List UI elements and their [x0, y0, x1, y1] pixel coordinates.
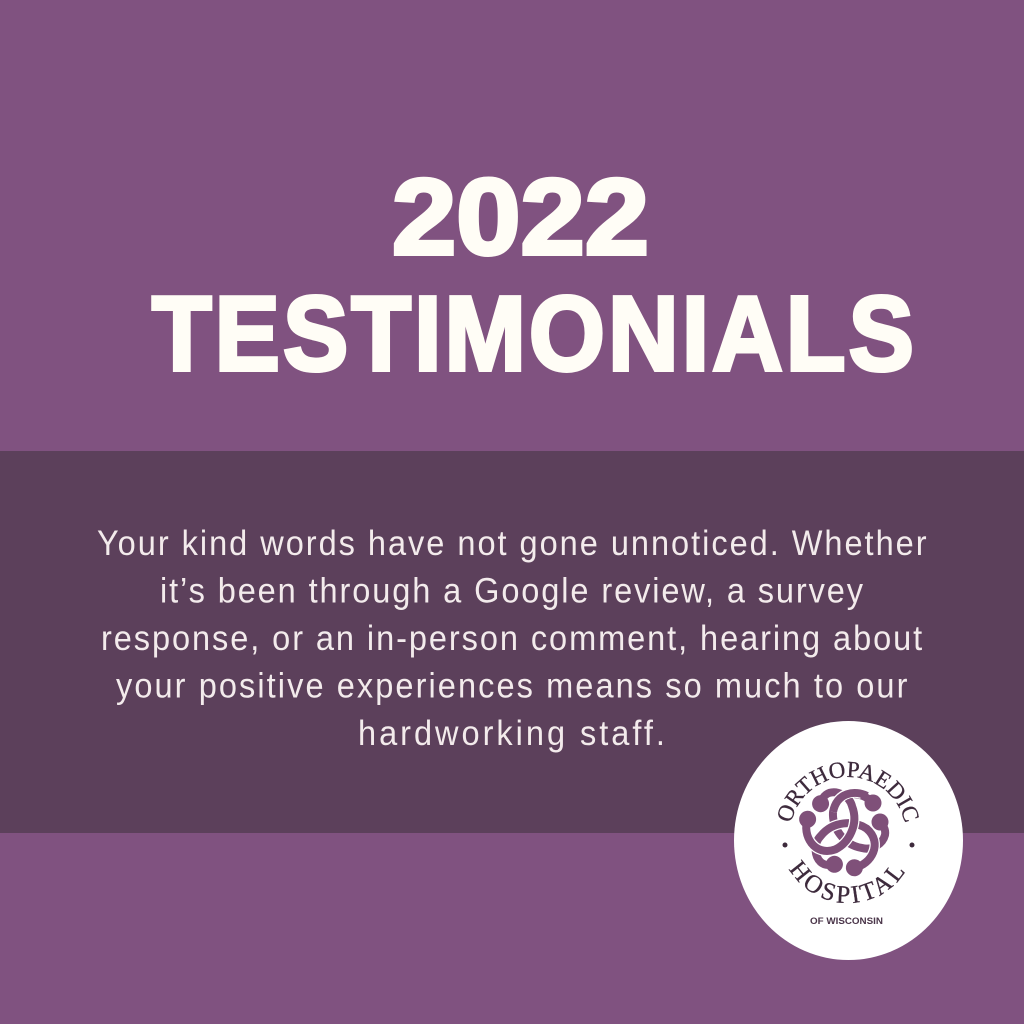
icon: knot emblem [794, 786, 888, 883]
message text: Your kind words have not gone unnoticed. Whether [97, 524, 927, 563]
logo dots [782, 842, 914, 848]
dark message band [0, 451, 1024, 833]
title: 2022 [392, 156, 649, 277]
logo badge [734, 721, 963, 960]
logo text: of wisconsin: OF WISCONSIN [810, 916, 883, 927]
message text: your positive experiences means so much to our [116, 666, 907, 706]
message text: hardworking staff. [358, 714, 665, 753]
message text: it’s been through a Google review, a survey [160, 571, 863, 611]
logo text: hospital: HOSPITAL [788, 859, 905, 904]
logo text: orthopaedic: ORTHOPAEDIC [778, 762, 919, 822]
message text [97, 524, 927, 753]
title [152, 156, 914, 393]
message text: response, or an in-person comment, hearing about [101, 619, 923, 658]
title: TESTIMONIALS [152, 274, 914, 393]
